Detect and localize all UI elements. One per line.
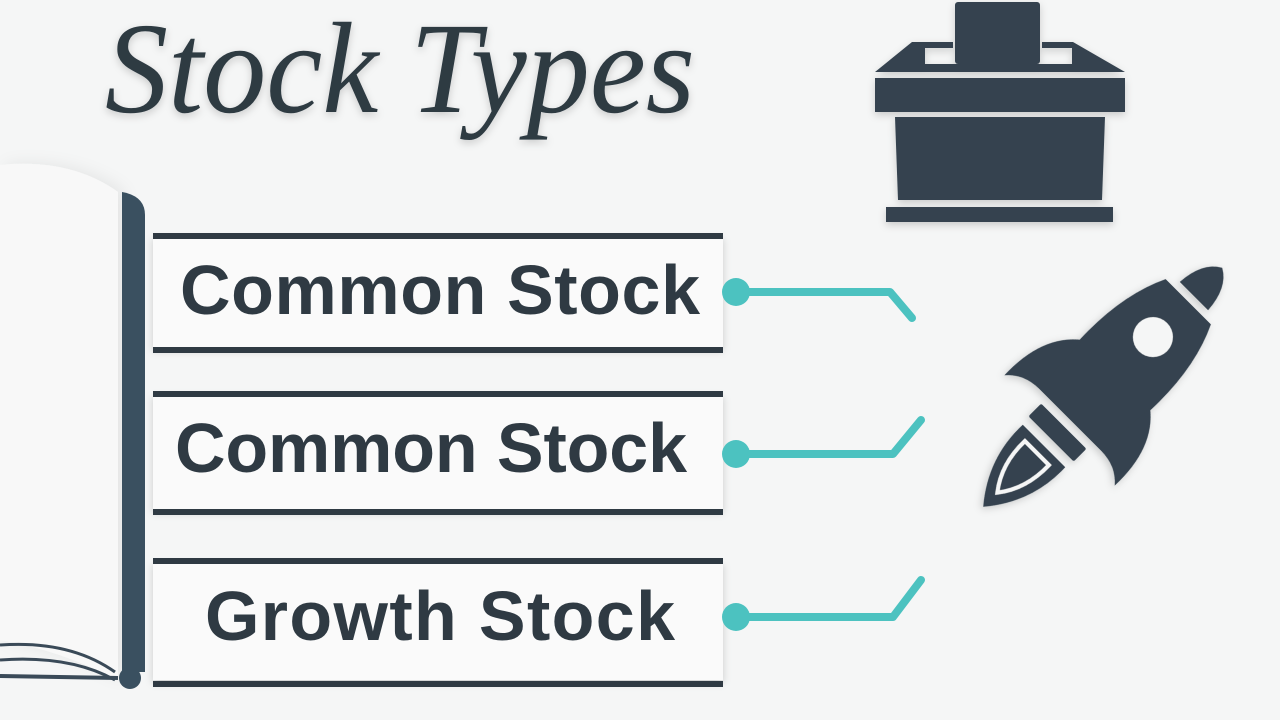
row 3: Growth Stock: Growth Stock (205, 577, 675, 655)
icon: ballot box (875, 2, 1125, 222)
row 1: Common Stock: Common Stock (180, 251, 700, 329)
row 2: Common Stock: Common Stock (175, 409, 687, 487)
connector 3 (722, 580, 921, 631)
book (0, 164, 145, 689)
row 2: Common Stock (153, 391, 723, 515)
connector 2 (722, 420, 921, 468)
row 3: Growth Stock (153, 558, 723, 687)
title: Stock Types (105, 0, 695, 141)
list rows (153, 233, 723, 687)
connectors (722, 278, 921, 631)
row 1: Common Stock (153, 233, 723, 353)
connector 1 (722, 278, 912, 318)
icon: rocket (928, 213, 1277, 562)
book spine (122, 192, 145, 672)
book page (0, 164, 118, 680)
